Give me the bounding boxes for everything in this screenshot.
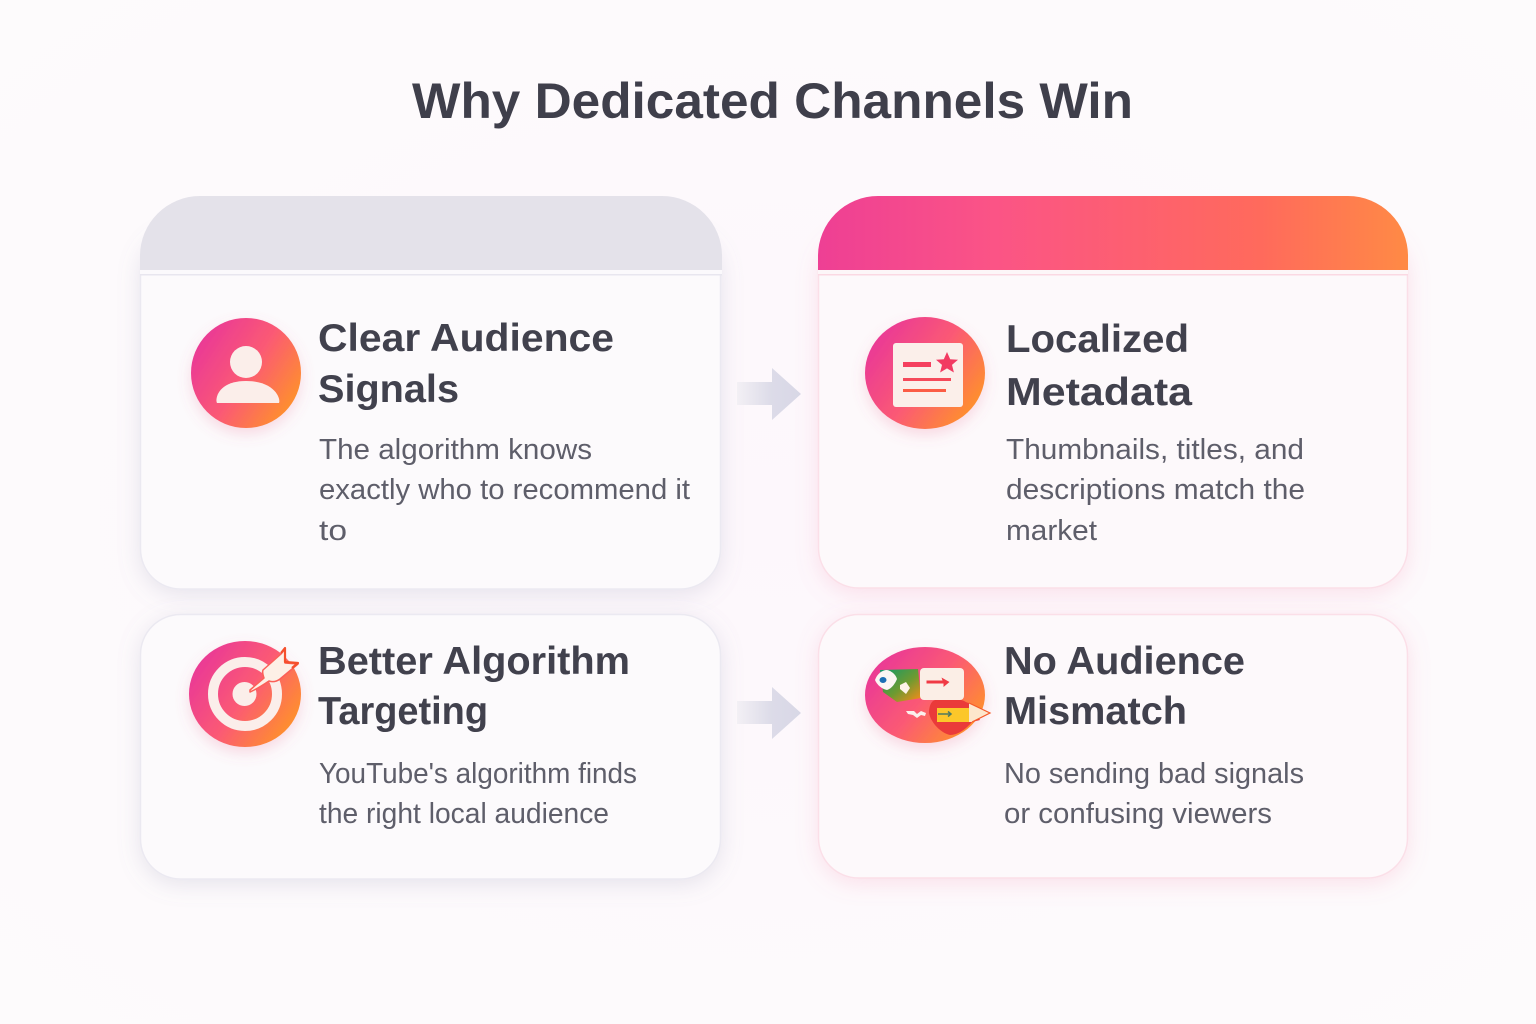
text: Better Algorithm Targeting description: the right local audience [319,798,609,830]
heading: No Audience Mismatch [1004,640,1245,733]
icon: metadata card [865,317,985,429]
arrow: top row [737,368,801,420]
heading: Localized Metadata [1006,318,1192,414]
header band: grey [140,196,722,270]
panel: top right card [818,196,1408,588]
card body [818,230,1408,588]
icon: person [191,318,301,428]
panel: bottom right card [818,614,1408,878]
text: Better Algorithm Targeting description: YouTube's algorithm finds [319,758,637,790]
title: Why Dedicated Channels Win [412,73,1133,129]
heading: No Audience Mismatch: No Audience [1004,640,1245,683]
text: Localized Metadata description: market [1006,515,1097,547]
text: Localized Metadata description [1006,434,1305,547]
panel: top left card [140,196,722,589]
text: Clear Audience Signals description: to [319,515,347,547]
heading: Localized Metadata: Metadata [1006,371,1192,414]
text: Clear Audience Signals description: exactly who to recommend it [319,474,690,506]
heading: Better Algorithm Targeting: Targeting [318,690,488,733]
text: No Audience Mismatch description: No sending bad signals [1004,758,1304,790]
text: No Audience Mismatch description [1004,758,1304,830]
heading: Better Algorithm Targeting [318,640,630,733]
heading: Localized Metadata: Localized [1006,318,1189,361]
card body [140,230,720,589]
arrow: bottom row [737,687,801,739]
text: Clear Audience Signals description [319,434,690,547]
text: Localized Metadata description: Thumbnails, titles, and [1006,434,1304,466]
icon: mismatch fish and pencil [865,647,990,743]
panel: bottom left card [140,614,720,879]
text: Better Algorithm Targeting description [319,758,637,830]
heading: Better Algorithm Targeting: Better Algorithm [318,640,630,683]
heading: Clear Audience Signals [318,317,614,411]
header band: gradient [818,196,1408,270]
text: No Audience Mismatch description: or confusing viewers [1004,798,1272,830]
text: Localized Metadata description: descriptions match the [1006,474,1305,506]
heading: Clear Audience Signals: Clear Audience [318,317,614,360]
heading: No Audience Mismatch: Mismatch [1004,690,1187,733]
card body [818,614,1408,878]
card body [140,614,720,879]
heading: Clear Audience Signals: Signals [318,368,459,411]
icon: target with dart [189,641,301,747]
text: Clear Audience Signals description: The algorithm knows [319,434,592,466]
